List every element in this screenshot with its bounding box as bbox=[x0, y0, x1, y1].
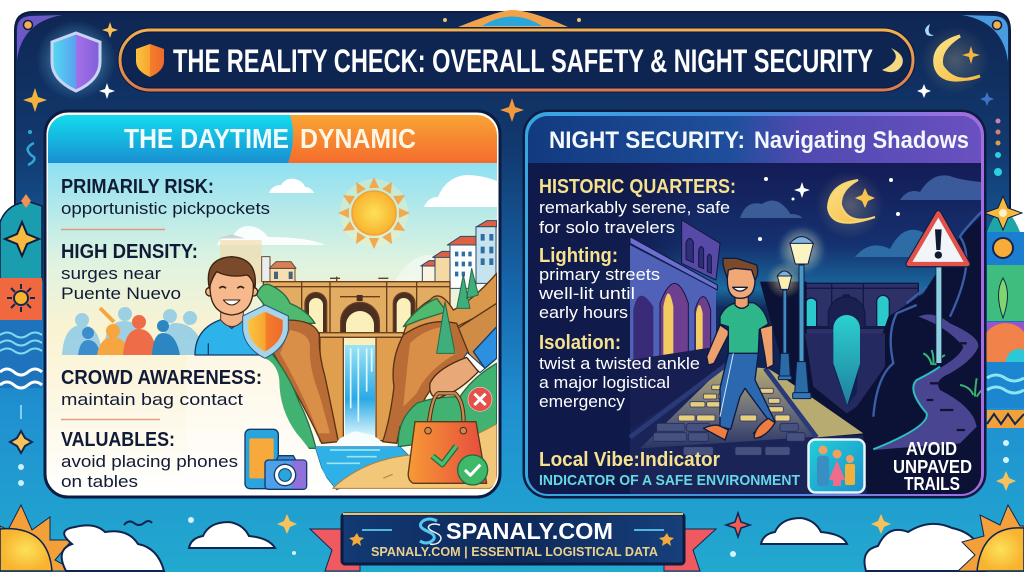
lamp glow bbox=[779, 227, 824, 272]
heading: night security bbox=[549, 127, 969, 154]
footer banner bbox=[310, 514, 716, 571]
text block: avoid unpaved trails: AVOID bbox=[906, 439, 957, 459]
footer subtitle: SPANALY.COM | ESSENTIAL LOGISTICAL DATA bbox=[371, 544, 659, 559]
icon: phone and camera bbox=[245, 429, 307, 489]
panel header bbox=[528, 116, 981, 163]
text block: avoid unpaved trails: UNPAVED bbox=[893, 457, 972, 477]
bottom decorations left bbox=[0, 505, 297, 571]
text block: crowd awareness: maintain bag contact bbox=[61, 390, 243, 409]
sandy bank bbox=[333, 424, 497, 488]
right town buildings bbox=[421, 221, 497, 288]
text block: primarily risk: PRIMARILY RISK: bbox=[61, 176, 214, 198]
text block: local vibe: INDICATOR OF A SAFE ENVIRONMENT bbox=[539, 472, 800, 489]
text block: isolation: Isolation: bbox=[539, 332, 621, 354]
illustration: hand holding bag bbox=[408, 327, 497, 485]
road bbox=[630, 365, 867, 497]
scene: night landscape bbox=[630, 210, 987, 497]
text block: historic quarters: HISTORIC QUARTERS: bbox=[539, 176, 736, 198]
text area backdrop bbox=[187, 355, 327, 478]
waterfall bbox=[345, 345, 375, 435]
text block: primarily risk: opportunistic pickpockets bbox=[61, 199, 270, 218]
panel: night security bbox=[524, 111, 987, 497]
text block: lighting bbox=[538, 245, 660, 322]
bridge upper bbox=[263, 277, 450, 345]
text block: high density: Puente Nuevo bbox=[61, 284, 181, 303]
icon: small orange shield bbox=[136, 44, 164, 77]
text block: isolation: emergency bbox=[539, 392, 625, 411]
bottom decorations right bbox=[726, 505, 1024, 571]
footer title: SPANALY.COM bbox=[446, 518, 613, 544]
text block: valuables bbox=[61, 429, 238, 491]
icon: glowing shield bbox=[23, 20, 118, 165]
icon: small moon in title bbox=[882, 48, 903, 72]
left side decorative column bbox=[0, 194, 42, 486]
text block: historic quarters: for solo travelers bbox=[539, 218, 675, 237]
text block: isolation: twist a twisted ankle bbox=[539, 354, 700, 373]
icon: spanaly logo bbox=[420, 519, 441, 544]
pool bbox=[315, 447, 410, 490]
scene: daytime landscape bbox=[187, 221, 497, 492]
illustration: walking man bbox=[703, 258, 775, 440]
icon: sun bbox=[338, 177, 410, 249]
icon: night moon bbox=[820, 176, 880, 234]
heading: night security: Navigating Shadows bbox=[754, 127, 969, 154]
text block: high density: surges near bbox=[61, 264, 161, 283]
icon: family badge bbox=[808, 440, 864, 492]
panel: the daytime dynamic bbox=[45, 111, 500, 497]
text block: crowd awareness bbox=[61, 367, 262, 409]
icon: warning sign bbox=[909, 213, 967, 363]
icon: crescent moon with stars bbox=[500, 24, 1002, 176]
text block: avoid unpaved trails bbox=[893, 439, 972, 494]
text block: historic quarters bbox=[539, 176, 736, 237]
text block: valuables: avoid placing phones bbox=[61, 452, 238, 471]
left hill and cliff bbox=[257, 284, 338, 443]
illustration: smiling man bbox=[195, 257, 268, 355]
right hill and cliff bbox=[403, 273, 497, 335]
text block: high density: HIGH DENSITY: bbox=[61, 241, 198, 263]
text block: historic quarters: remarkably serene, safe bbox=[539, 198, 730, 217]
text block: lighting: Lighting: bbox=[539, 245, 618, 267]
trail bbox=[873, 314, 978, 450]
text block: avoid unpaved trails: TRAILS bbox=[904, 474, 960, 494]
text block: lighting: early hours bbox=[539, 303, 628, 322]
text block: local vibe: Local Vibe:Indicator bbox=[539, 449, 720, 471]
text block: isolation: a major logistical bbox=[539, 373, 670, 392]
title banner bbox=[120, 30, 913, 90]
right side decorative column bbox=[982, 196, 1024, 491]
panel header bbox=[48, 115, 497, 163]
icon: man's shield bbox=[243, 305, 288, 358]
text block: valuables: VALUABLES: bbox=[61, 429, 175, 451]
bridge bbox=[805, 283, 918, 334]
clouds bbox=[217, 175, 497, 288]
bridge piers bbox=[320, 337, 403, 441]
building bbox=[630, 220, 723, 430]
text block: lighting: primary streets bbox=[539, 265, 660, 284]
text block: local vibe bbox=[539, 449, 800, 489]
left town buildings bbox=[218, 234, 296, 283]
text block: lighting: well-lit until bbox=[538, 284, 635, 303]
text block: isolation bbox=[539, 332, 700, 411]
scene: street lamps bbox=[766, 227, 825, 399]
heading: the daytime: THE DAYTIME bbox=[124, 123, 289, 154]
gorge walls and cliff bbox=[760, 210, 987, 497]
text block: high density bbox=[61, 241, 198, 303]
text block: primarily risk bbox=[61, 176, 270, 218]
sky with clouds and stars bbox=[740, 175, 981, 257]
heading: night security: NIGHT SECURITY: bbox=[549, 127, 745, 154]
text block: valuables: on tables bbox=[61, 472, 138, 491]
text block: crowd awareness: CROWD AWARENESS: bbox=[61, 367, 262, 389]
heading: dynamic: DYNAMIC bbox=[300, 123, 416, 154]
illustration: crowd bbox=[62, 307, 205, 355]
